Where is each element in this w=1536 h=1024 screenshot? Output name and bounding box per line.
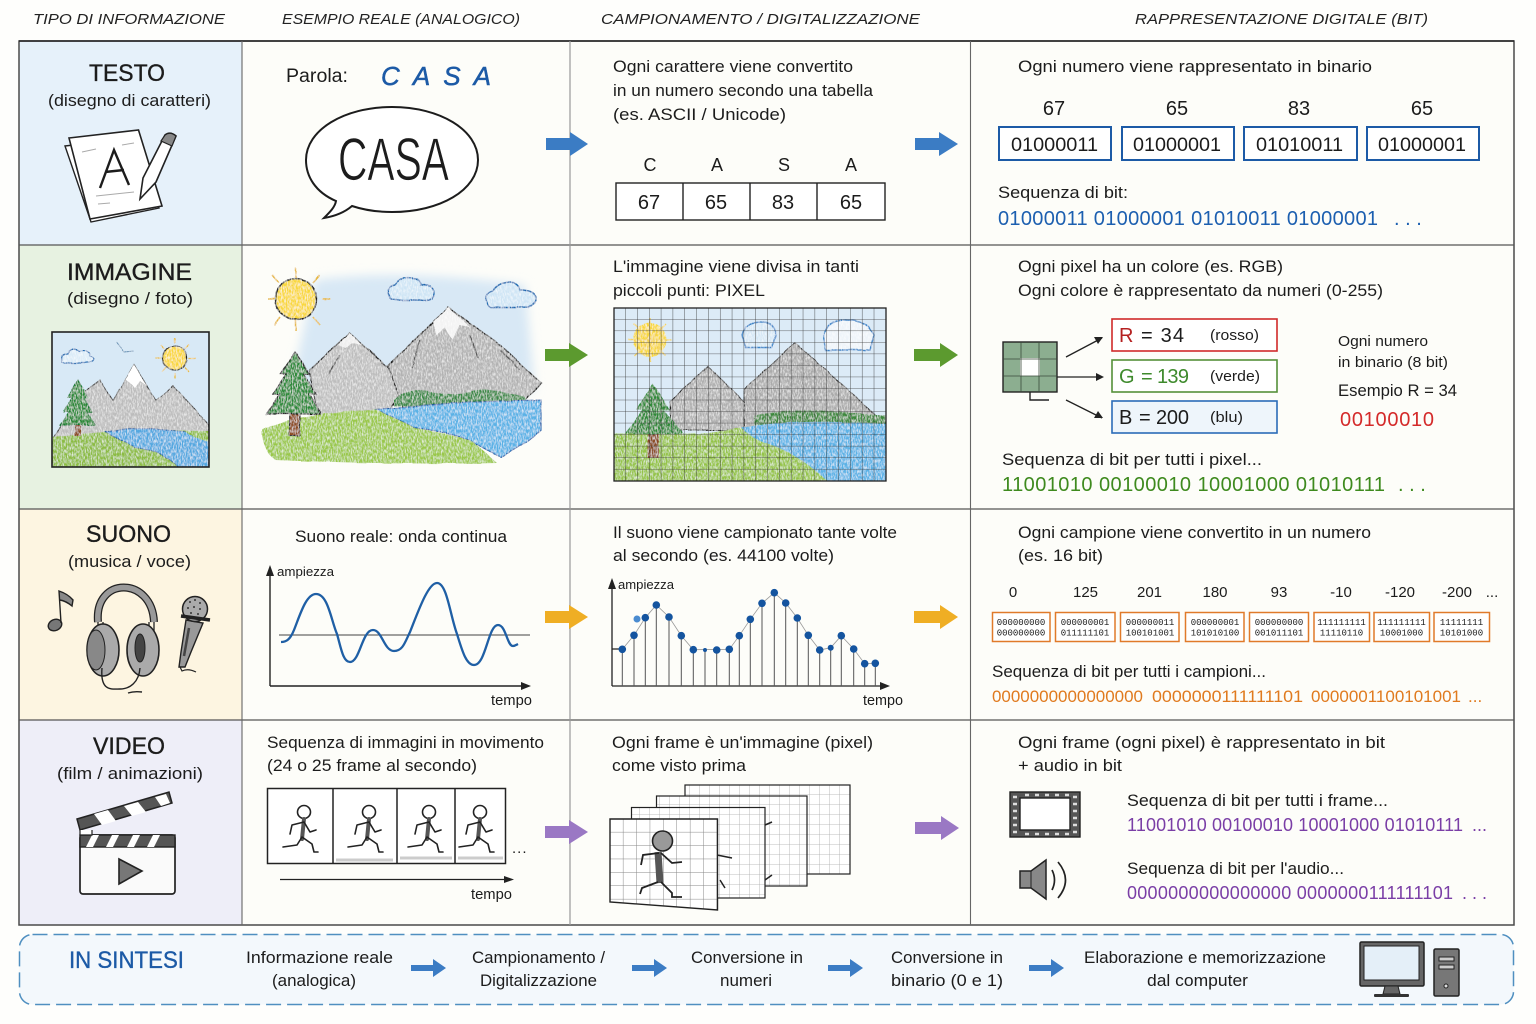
chart: sampled wave: tempo <box>863 692 903 709</box>
heading: immagine <box>67 259 193 308</box>
step 4: binario (0 e 1) <box>891 971 1003 990</box>
arrow <box>915 132 958 156</box>
bit sequence: pixels: . . . <box>1398 474 1426 496</box>
row: suono <box>46 521 1498 709</box>
rgb boxes: (verde) <box>1210 368 1260 385</box>
sample binary boxes: 11110110 <box>1320 628 1363 638</box>
binary representation: 01000001 <box>1378 135 1466 156</box>
arrow <box>545 605 588 629</box>
sample binary boxes: 000000000 <box>997 628 1045 638</box>
rgb boxes: (rosso) <box>1210 327 1259 344</box>
binary example <box>1338 333 1457 431</box>
arrow <box>828 959 863 977</box>
chart: sampled wave: ampiezza <box>618 577 675 592</box>
pixel text <box>613 257 859 300</box>
step 2 <box>472 948 605 990</box>
heading: testo: (disegno di caratteri) <box>48 91 211 110</box>
icon: headphones <box>87 588 159 693</box>
icon: pixel block with arrows <box>1003 337 1104 418</box>
film frames <box>268 788 528 903</box>
step 2: Digitalizzazione <box>480 971 597 990</box>
step 5: dal computer <box>1147 971 1248 990</box>
word label: CASA <box>381 61 491 91</box>
binary representation: 01010011 <box>1256 135 1343 156</box>
sample values: -10 <box>1330 584 1352 601</box>
bit sequence: samples: 0000001100101001 <box>1311 687 1461 706</box>
binary representation: 01000001 <box>1133 135 1221 156</box>
bit sequence: audio <box>1127 859 1487 903</box>
rgb boxes: B <box>1119 407 1132 429</box>
speech bubble <box>306 107 478 218</box>
sample binary boxes: 000000011 <box>1126 618 1174 628</box>
stacked pixel frames <box>610 785 850 910</box>
binary representation: Sequenza di bit: <box>998 183 1128 202</box>
arrow <box>1029 959 1064 977</box>
sample binary boxes: 111111111 <box>1377 618 1426 628</box>
samples text: Ogni campione viene convertito in un numero <box>1018 523 1371 542</box>
binary representation: 67 <box>1043 98 1065 120</box>
heading: in sintesi: IN SINTESI <box>69 947 184 974</box>
bit sequence: samples <box>992 662 1482 706</box>
word label: Parola: <box>286 66 348 87</box>
bit sequence: pixels <box>1002 450 1426 496</box>
sample binary boxes: 000000000 <box>1255 618 1303 628</box>
panel: in sintesi <box>20 934 1514 1004</box>
binary representation: . . . <box>1394 208 1422 230</box>
sample values: -200 <box>1442 584 1472 601</box>
column headers: RAPPRESENTAZIONE DIGITALE (BIT) <box>1135 11 1428 28</box>
heading: immagine: (disegno / foto) <box>67 289 193 308</box>
bit sequence: audio: Sequenza di bit per l'audio... <box>1127 859 1344 878</box>
pixel text: L'immagine viene divisa in tanti <box>613 257 859 276</box>
samples text: (es. 16 bit) <box>1018 546 1103 565</box>
word label <box>286 61 491 91</box>
heading: video: (film / animazioni) <box>57 764 203 783</box>
sample values: 93 <box>1271 584 1287 601</box>
step 4: Conversione in <box>891 948 1003 967</box>
rgb boxes: R <box>1119 325 1133 347</box>
video text: Sequenza di immagini in movimento <box>267 733 544 752</box>
sample values: 125 <box>1073 584 1098 601</box>
row: testo <box>48 57 1479 230</box>
arrow <box>914 343 958 367</box>
sample binary boxes: 111111111 <box>1317 618 1366 628</box>
pixelated landscape <box>614 308 886 481</box>
heading: suono <box>68 521 191 571</box>
row: video <box>57 733 1487 910</box>
step 3 <box>691 948 803 990</box>
sample binary boxes: 000000001 <box>1061 618 1109 628</box>
bit sequence: samples: ... <box>1468 687 1482 706</box>
samples text <box>1018 523 1371 565</box>
sample binary boxes: 101010100 <box>1191 628 1239 638</box>
rgb text: Ogni pixel ha un colore (es. RGB) <box>1018 257 1283 276</box>
binary representation: 01000011 <box>1011 135 1098 156</box>
column headers: TIPO DI INFORMAZIONE <box>33 11 226 28</box>
bit sequence: samples: 0000000111111101 <box>1152 687 1303 706</box>
icon: music note <box>46 591 73 633</box>
frame text <box>612 733 873 775</box>
binary representation <box>998 57 1479 230</box>
pixel text: piccoli punti: PIXEL <box>613 281 765 300</box>
binary example: in binario (8 bit) <box>1338 354 1448 371</box>
binary representation: 65 <box>1166 98 1188 120</box>
bit sequence: audio: 0000000000000000 0000000111111101 <box>1127 883 1453 903</box>
arrow <box>411 959 446 977</box>
rgb text <box>1018 257 1383 300</box>
sample binary boxes: 000000001 <box>1191 618 1239 628</box>
conversion text: (es. ASCII / Unicode) <box>613 105 786 124</box>
ascii table: 65 <box>705 192 727 214</box>
bit sequence: pixels: Sequenza di bit per tutti i pixel... <box>1002 450 1262 469</box>
sample values: 201 <box>1137 584 1162 601</box>
frame text: Ogni frame è un'immagine (pixel) <box>612 733 873 752</box>
bit sequence: pixels: 11001010 00100010 10001000 01010111 <box>1002 474 1385 496</box>
step 3: Conversione in <box>691 948 803 967</box>
bit sequence: frames: ... <box>1472 815 1487 835</box>
bit sequence: frames: Sequenza di bit per tutti i frame... <box>1127 791 1388 810</box>
heading: suono: (musica / voce) <box>68 552 191 571</box>
step 2: Campionamento / <box>472 948 605 967</box>
sample binary boxes: 10001000 <box>1380 628 1423 638</box>
sample binary boxes: 000000000 <box>997 618 1045 628</box>
column headers: ESEMPIO REALE (ANALOGICO) <box>282 11 520 28</box>
ascii table: S <box>778 155 790 175</box>
binary representation: 65 <box>1411 98 1433 120</box>
binary example: Esempio R = 34 <box>1338 381 1457 400</box>
rgb boxes: = 200 <box>1139 407 1189 429</box>
bit sequence: frames: 11001010 00100010 10001000 01010111 <box>1127 815 1463 835</box>
illustration: landscape <box>262 268 541 464</box>
ascii table: 83 <box>772 192 794 214</box>
heading: video: VIDEO <box>93 733 165 760</box>
heading: testo <box>48 60 211 110</box>
rgb boxes <box>1112 319 1277 433</box>
step 1 <box>246 948 393 990</box>
sample values: 180 <box>1202 584 1228 601</box>
chart: sampled wave <box>608 577 903 709</box>
arrow <box>545 343 588 367</box>
ascii table: 67 <box>638 192 660 214</box>
binary representation: 01000011 01000001 01010011 01000001 <box>998 208 1378 230</box>
conversion text: Ogni carattere viene convertito <box>613 57 853 76</box>
step 4 <box>891 948 1003 990</box>
sample binary boxes: 10101000 <box>1440 628 1483 638</box>
icon: microphone <box>179 596 210 672</box>
bit description <box>1018 733 1385 775</box>
icon: computer <box>1360 942 1459 997</box>
row: immagine <box>52 257 1457 496</box>
bit description: Ogni frame (ogni pixel) è rappresentato in bit <box>1018 733 1385 752</box>
binary example: Ogni numero <box>1338 333 1428 350</box>
wave title: Suono reale: onda continua <box>295 527 508 546</box>
step 5: Elaborazione e memorizzazione <box>1084 948 1326 967</box>
chart: continuous wave: tempo <box>491 692 532 709</box>
heading: testo: TESTO <box>89 60 165 87</box>
sample values: ... <box>1486 584 1498 601</box>
arrow <box>545 820 588 844</box>
step 1: Informazione reale <box>246 948 393 967</box>
step 3: numeri <box>720 971 772 990</box>
sample binary boxes: 100101001 <box>1126 628 1174 638</box>
sampling text <box>613 523 897 565</box>
conversion text <box>613 57 874 124</box>
step 5 <box>1084 948 1326 990</box>
icon: speaker <box>1020 860 1066 899</box>
icon: paper and pencil <box>65 130 176 222</box>
ascii table: A <box>845 155 857 175</box>
bit sequence: samples: 0000000000000000 <box>992 687 1143 706</box>
icon: clapperboard <box>77 792 175 894</box>
ascii table: A <box>711 155 723 175</box>
chart: continuous wave <box>266 564 532 709</box>
ascii table <box>616 155 885 220</box>
bit sequence: frames <box>1127 791 1487 835</box>
bit sequence: samples: Sequenza di bit per tutti i campioni... <box>992 662 1266 681</box>
sample binary boxes: 001011101 <box>1255 628 1303 638</box>
frame text: come visto prima <box>612 756 747 775</box>
column headers: CAMPIONAMENTO / DIGITALIZZAZIONE <box>601 11 921 28</box>
video text: (24 o 25 frame al secondo) <box>267 756 477 775</box>
binary representation: 83 <box>1288 98 1310 120</box>
arrow <box>914 605 958 629</box>
sample values <box>1009 584 1498 601</box>
sampling text: Il suono viene campionato tante volte <box>613 523 897 542</box>
video text <box>267 733 544 775</box>
bit sequence: audio: . . . <box>1462 883 1487 903</box>
rgb boxes: G <box>1119 366 1135 388</box>
arrow <box>546 132 588 156</box>
icon: film frame <box>1010 792 1080 837</box>
column headers <box>33 11 1428 28</box>
sample binary boxes: 11111111 <box>1440 618 1483 628</box>
conversion text: in un numero secondo una tabella <box>613 81 874 100</box>
rgb boxes: = 34 <box>1141 325 1184 347</box>
step 1: (analogica) <box>272 971 356 990</box>
arrow <box>915 816 959 840</box>
sample values: -120 <box>1385 584 1415 601</box>
icon: small landscape picture <box>52 332 209 467</box>
sampling text: al secondo (es. 44100 volte) <box>613 546 834 565</box>
film frames: ... <box>512 840 528 857</box>
sample values: 0 <box>1009 584 1017 601</box>
heading: suono: SUONO <box>86 521 171 548</box>
sample binary boxes: 011111101 <box>1061 628 1109 638</box>
rgb boxes: = 139 <box>1141 366 1189 388</box>
ascii table: 65 <box>840 192 862 214</box>
speech bubble: CASA <box>338 126 449 193</box>
heading: video <box>57 733 203 783</box>
ascii table: C <box>644 155 656 175</box>
film frames: tempo <box>471 886 512 903</box>
bit description: + audio in bit <box>1018 756 1122 775</box>
binary representation: Ogni numero viene rappresentato in binario <box>1018 57 1372 76</box>
heading: immagine: IMMAGINE <box>67 259 192 286</box>
arrow <box>632 959 667 977</box>
binary example: 00100010 <box>1340 409 1434 431</box>
rgb boxes: (blu) <box>1210 409 1243 426</box>
chart: continuous wave: ampiezza <box>277 564 335 579</box>
rgb text: Ogni colore è rappresentato da numeri (0-255) <box>1018 281 1383 300</box>
sample binary boxes <box>992 612 1490 642</box>
